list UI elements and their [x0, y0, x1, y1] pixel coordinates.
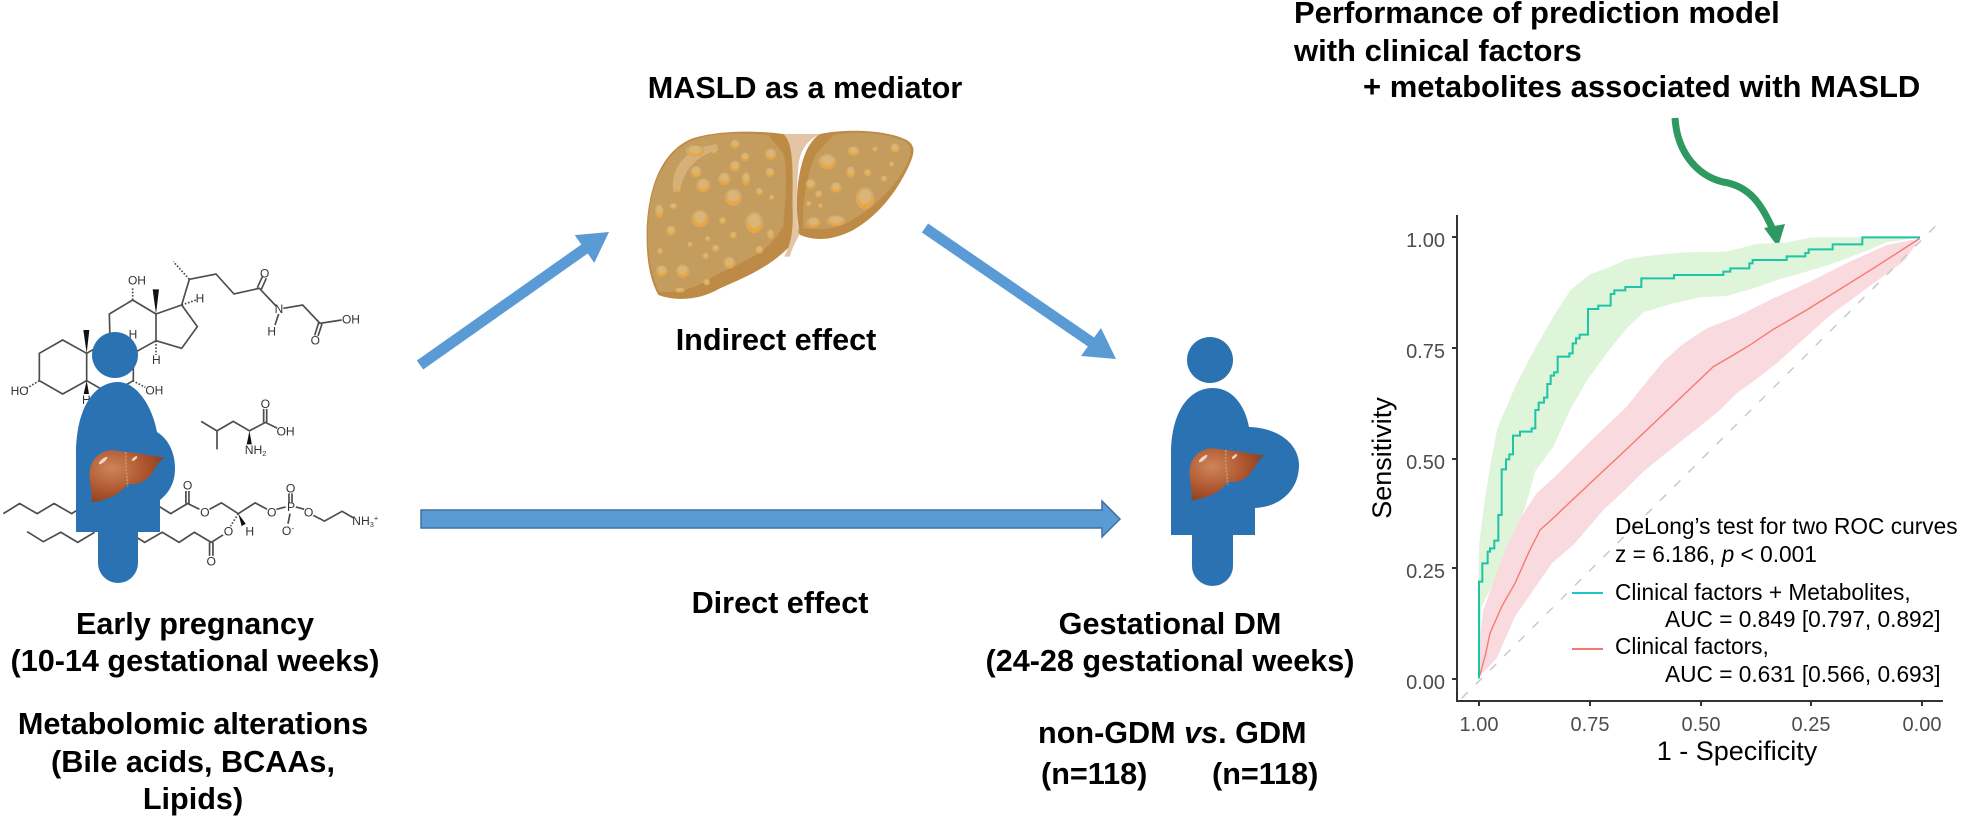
y axis tick labels: 1.00: [1406, 230, 1445, 252]
y axis tick labels: 0.75: [1406, 341, 1445, 363]
heading: prediction model performance: + metabolites associated with MASLD: [1363, 69, 1920, 104]
DeLong test note: DeLong’s test for two ROC curves: [1615, 513, 1958, 539]
text: gestational DM: Gestational DM: [1059, 607, 1281, 641]
text: early pregnancy: Early pregnancy: [76, 607, 314, 641]
leucine molecule: O: [261, 397, 270, 411]
lipid molecule: H: [245, 525, 254, 539]
leucine molecule: NH: [245, 443, 262, 457]
x axis tick labels: 0.50: [1682, 714, 1720, 736]
text: early pregnancy: (10-14 gestational weeks): [11, 644, 379, 678]
leucine molecule: [201, 397, 295, 458]
x axis title: 1 - Specificity: [1657, 736, 1818, 766]
legend: clinical factors: AUC = 0.631 [0.566, 0.693]: [1665, 661, 1941, 687]
leucine molecule: OH: [276, 425, 295, 439]
y axis tick labels: 0.00: [1406, 672, 1445, 694]
x axis tick labels: 0.75: [1571, 714, 1609, 736]
heading: prediction model performance: with clinical factors: [1293, 33, 1582, 68]
text: metabolomic alterations: Lipids): [143, 782, 243, 816]
bile acid molecule: OH: [342, 313, 360, 327]
lipid molecule: O: [200, 505, 210, 519]
leucine molecule: 2: [262, 449, 266, 458]
lipid molecule: O: [207, 555, 216, 569]
text: gestational DM: (24-28 gestational weeks): [986, 644, 1354, 678]
lipid molecule: O: [224, 525, 233, 539]
bile acid molecule: H: [196, 292, 204, 306]
bile acid molecule: OH: [128, 274, 146, 288]
text: group comparison: non-GDM vs. GDM: [1038, 716, 1307, 750]
lipid molecule: O: [282, 524, 291, 538]
legend: clinical factors: [1572, 633, 1941, 687]
chart bands and curves: [1462, 222, 1940, 698]
x axis tick labels: 1.00: [1460, 714, 1498, 736]
heading: MASLD as a mediator: MASLD as a mediator: [648, 71, 962, 105]
arrow: early pregnancy to MASLD: [417, 232, 609, 370]
x axis tick labels: 0.25: [1792, 714, 1830, 736]
bile acid molecule: H: [152, 353, 161, 367]
text: group comparison: (n=118): [1041, 757, 1147, 791]
lipid molecule: O: [304, 505, 313, 519]
lipid molecule: P: [287, 500, 295, 514]
bile acid molecule: [11, 262, 360, 407]
y axis tick labels: 0.50: [1406, 452, 1445, 474]
lipid molecule: O: [267, 505, 276, 519]
bile acid molecule: H: [129, 327, 137, 341]
arrow: direct effect: [421, 501, 1120, 537]
arrow: green curved pointer: [1675, 118, 1785, 247]
icon: gestational DM woman with liver: [1171, 337, 1299, 586]
lipid molecule: +: [374, 514, 378, 523]
lipid molecule: NH: [352, 514, 370, 528]
DeLong test note: z = 6.186, p < 0.001: [1615, 541, 1817, 567]
lipid molecule: -: [291, 524, 294, 533]
ROC chart: [1367, 215, 1958, 766]
y axis tick labels: 0.25: [1406, 561, 1445, 583]
legend: clinical factors + metabolites: [1572, 579, 1941, 632]
x axis tick labels: 0.00: [1903, 714, 1941, 736]
legend: clinical factors: Clinical factors,: [1615, 633, 1769, 659]
text: metabolomic alterations: (Bile acids, BCAAs,: [51, 745, 335, 779]
bile acid molecule: H: [82, 393, 91, 407]
lipid molecule: O: [183, 479, 192, 493]
label: indirect effect: Indirect effect: [676, 323, 876, 357]
lipid molecule: 3: [370, 520, 374, 529]
bile acid molecule: H: [267, 325, 276, 339]
arrow: MASLD to gestational DM: [922, 224, 1116, 359]
bile acid molecule: N: [275, 302, 283, 316]
chart axes: [1452, 215, 1943, 706]
bile acid molecule: O: [260, 266, 269, 280]
text: metabolomic alterations: Metabolomic alterations: [18, 707, 368, 741]
legend: clinical factors + metabolites: AUC = 0.849 [0.797, 0.892]: [1665, 606, 1941, 632]
bile acid molecule: O: [311, 333, 320, 347]
bile acid molecule: HO: [11, 384, 29, 398]
bile acid molecule: OH: [145, 383, 163, 397]
icon: early pregnancy woman with liver: [76, 332, 175, 583]
text: group comparison: (n=118): [1212, 757, 1318, 791]
label: direct effect: Direct effect: [692, 586, 868, 620]
y axis title: Sensitivity: [1367, 397, 1397, 519]
lipid molecule: O: [286, 481, 295, 495]
icon: fatty liver: [647, 131, 913, 299]
legend: clinical factors + metabolites: Clinical factors + Metabolites,: [1615, 579, 1911, 605]
lipid molecule: [3, 479, 378, 569]
